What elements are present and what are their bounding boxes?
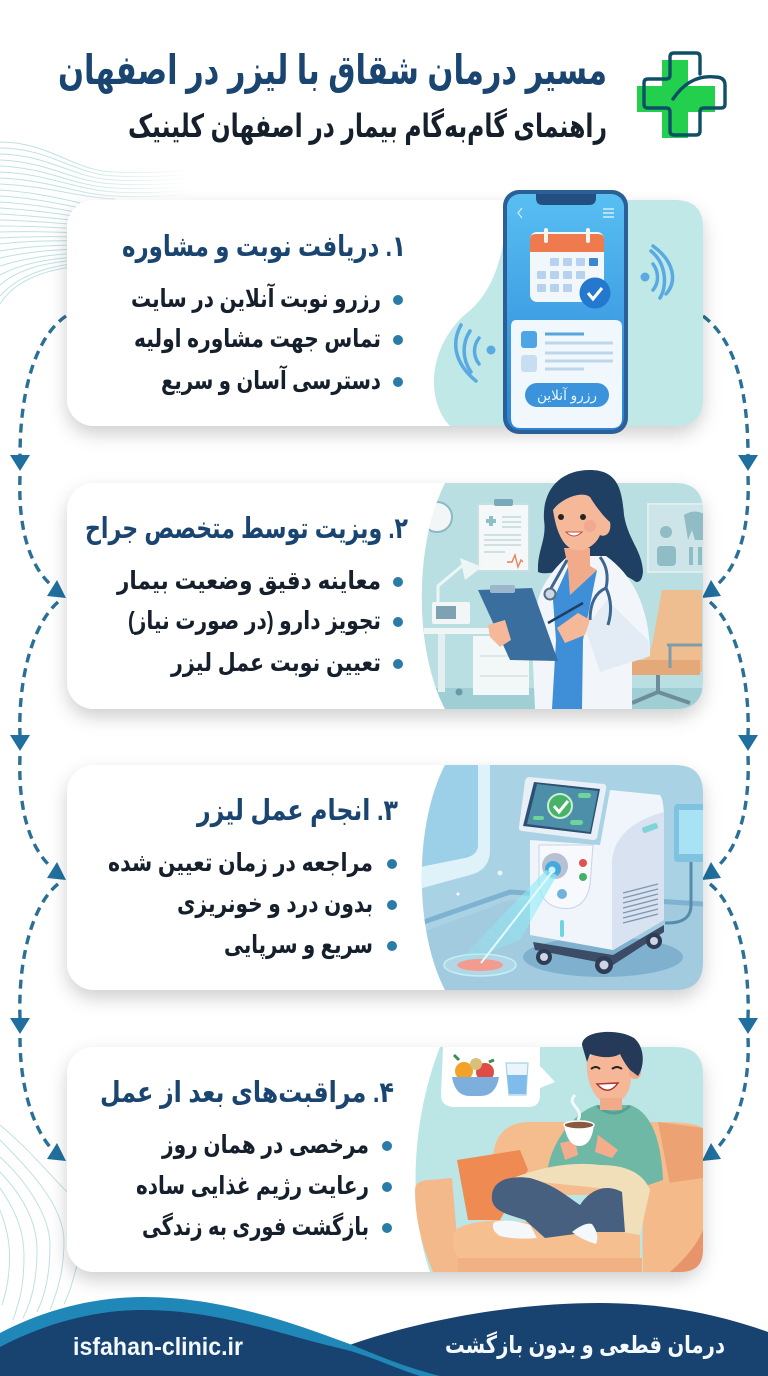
header — [58, 47, 725, 145]
illustration: doctor in clinic — [415, 470, 708, 709]
machine body — [530, 790, 664, 950]
vent — [623, 884, 658, 923]
button — [525, 383, 609, 407]
heading: ۱. دریافت نوبت و مشاوره — [122, 231, 406, 263]
smile — [597, 1083, 618, 1090]
desk and drawers — [424, 628, 490, 634]
pillow — [457, 1150, 528, 1220]
icon: medical cross logo — [637, 53, 725, 138]
bullet list — [131, 283, 403, 396]
arrows: right side path — [702, 316, 758, 1161]
arrows: left side path — [10, 316, 66, 1161]
bullet list: بازگشت فوری به زندگی — [142, 1212, 369, 1242]
stethoscope — [550, 557, 611, 625]
desk lamp — [438, 565, 463, 602]
speech bubble — [441, 1047, 555, 1107]
heading: ۴. مراقبت‌های بعد از عمل — [100, 1077, 394, 1109]
sofa right arm — [642, 1178, 703, 1272]
desk device — [432, 602, 470, 624]
bullet list: بدون درد و خونریزی — [177, 890, 373, 919]
white form panel — [511, 320, 622, 428]
window — [422, 765, 490, 888]
illustration: phone: رزرو آنلاین — [537, 387, 597, 404]
base and wheels — [533, 925, 664, 965]
icon: right wifi waves — [640, 246, 673, 298]
bullet list: تماس جهت مشاوره اولیه — [134, 325, 381, 354]
neck — [564, 548, 597, 595]
illustration: phone — [503, 190, 628, 434]
website url: isfahan-clinic.ir — [73, 1333, 243, 1361]
sweater — [548, 1105, 663, 1188]
bullet list: معاینه دقیق وضعیت بیمار — [115, 567, 381, 596]
sofa seat — [453, 1220, 640, 1262]
background wave lines — [0, 142, 190, 1320]
heading: ۳. انجام عمل لیزر — [195, 795, 398, 827]
card background — [67, 765, 703, 990]
sofa back — [493, 1122, 703, 1195]
teal blob — [434, 200, 703, 426]
floor target — [444, 954, 516, 976]
bullet list: رزرو نوبت آنلاین در سایت — [131, 283, 381, 314]
chair — [643, 590, 702, 672]
doctor face — [553, 495, 610, 550]
hands and cup — [560, 1135, 618, 1160]
bullet list — [136, 1131, 392, 1242]
bullet list: تجویز دارو (در صورت نیاز) — [128, 607, 381, 636]
head — [587, 1052, 631, 1103]
panel: step 2 — [67, 470, 708, 709]
doctor coat — [532, 556, 650, 709]
card background — [67, 200, 703, 426]
bullet list: دسترسی آسان و سریع — [161, 365, 381, 396]
hair — [582, 1032, 643, 1076]
footer right wave — [330, 1303, 768, 1376]
card background — [67, 1047, 703, 1272]
steam — [572, 1095, 580, 1120]
bullet list: مرخصی در همان روز — [160, 1131, 369, 1160]
clock — [428, 501, 453, 533]
footer — [0, 1297, 768, 1376]
illustration: patient resting on sofa — [405, 1032, 705, 1272]
heading: ۲. ویزیت توسط متخصص جراح — [85, 513, 408, 545]
machine shadow — [523, 937, 683, 977]
blanket — [513, 1164, 650, 1235]
bullet list: سریع و سرپایی — [224, 931, 373, 960]
screen — [519, 777, 606, 840]
bullet list — [108, 849, 397, 960]
wall monitor — [674, 804, 703, 862]
icon: water glass — [506, 1063, 528, 1095]
legs — [492, 1177, 625, 1238]
footer left wave — [0, 1310, 420, 1376]
bullet list: تعیین نوبت عمل لیزر — [169, 649, 381, 678]
clipboard — [478, 588, 558, 661]
bullet list — [115, 567, 403, 678]
check icon — [548, 794, 572, 818]
pen hand — [557, 613, 590, 643]
card background — [67, 483, 703, 709]
panel: step 1 — [67, 190, 703, 434]
sleeve shading — [585, 600, 650, 672]
socks — [493, 1221, 537, 1239]
panel: step 3 — [67, 765, 720, 990]
icon: left wifi waves — [456, 325, 496, 381]
illustration: laser machine — [415, 765, 720, 990]
sofa left arm — [415, 1178, 460, 1272]
medical chart — [478, 504, 529, 571]
right poster — [648, 504, 708, 572]
subtitle: راهنمای گام‌به‌گام بیمار در اصفهان کلینیک — [128, 107, 607, 145]
icon: calendar — [530, 228, 610, 308]
bullet list: مراجعه در زمان تعیین شده — [108, 849, 373, 878]
footer left wave accent — [0, 1297, 440, 1376]
bullet list: رعایت رژیم غذایی ساده — [136, 1172, 369, 1200]
laser beam — [455, 870, 557, 965]
control panel — [539, 845, 593, 909]
panel: step 4 — [67, 1032, 705, 1272]
icon: fruit bowl — [452, 1055, 499, 1096]
scrubs — [552, 567, 597, 709]
doctor hair — [538, 470, 643, 582]
